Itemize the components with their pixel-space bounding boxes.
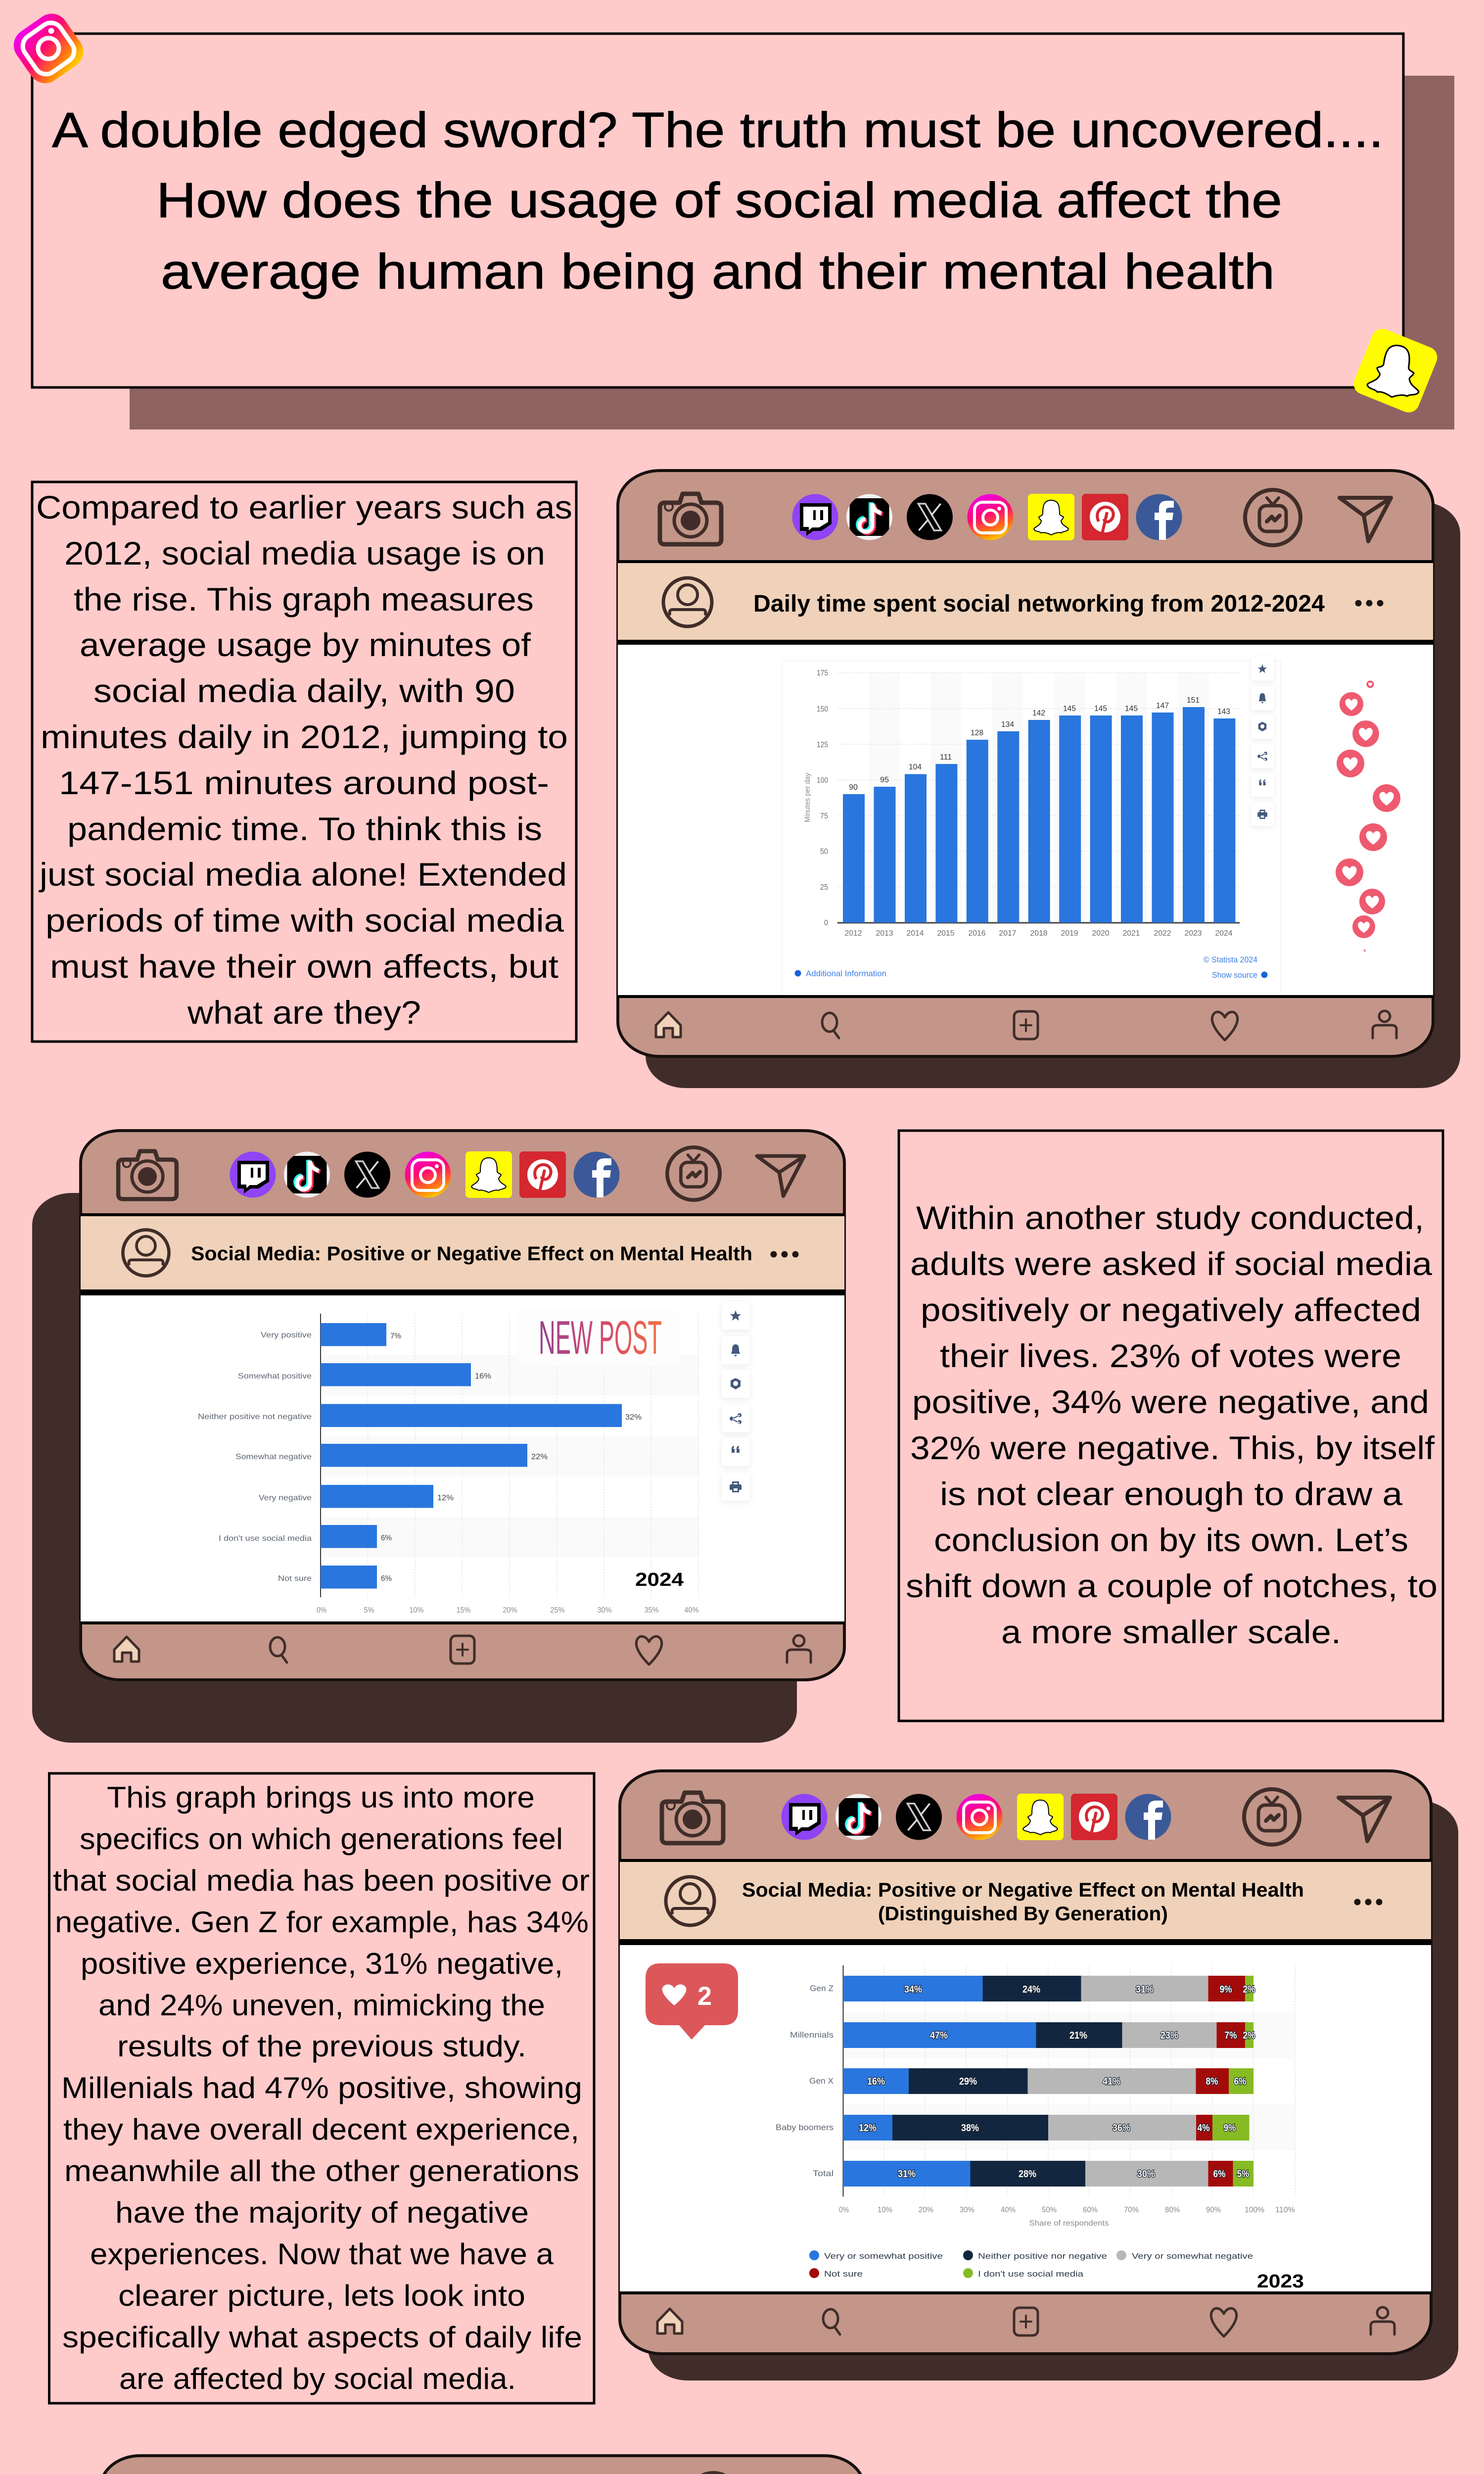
text block: adults study [899, 1131, 1443, 1721]
bar chart: minutes per day: 2017 [999, 929, 1017, 938]
row: Baby boomers: 9% [1224, 2123, 1236, 2134]
bar chart: minutes per day: 2013 [876, 929, 893, 938]
bar chart: minutes per day [782, 661, 1281, 993]
text block: adults study: a more smaller scale. [1001, 1614, 1341, 1650]
bottom navigation icons [114, 1635, 811, 1665]
icon: camera [662, 1793, 723, 1843]
row: Total: 31% [898, 2169, 916, 2180]
text block: usage on the rise: pandemic time. To think this is [67, 810, 542, 847]
row: Millennials: 21% [1069, 2030, 1087, 2041]
text block: usage on the rise: 2012, social media usage is on [64, 535, 545, 571]
bar chart: effect on mental health: Not sure [278, 1574, 312, 1583]
text block: usage on the rise [32, 482, 576, 1042]
x axis labels: Share of respondents [1029, 2219, 1109, 2228]
bar chart: minutes per day: 95 [880, 776, 889, 784]
x axis labels: 20% [919, 2206, 933, 2214]
text block: generations: specifics on which generations feel [80, 1822, 563, 1856]
bar chart: minutes per day: 2016 [969, 929, 986, 938]
bar chart: minutes per day: 134 [1001, 720, 1014, 729]
icon: igtv [687, 2473, 740, 2474]
text block: generations: negative. Gen Z for example, has 34% [55, 1905, 589, 1939]
bar chart: minutes per day: 90 [849, 783, 858, 792]
text block: usage on the rise: Compared to earlier years such as [36, 489, 572, 525]
bar chart: effect on mental health: 10% [410, 1606, 423, 1615]
row: Gen X: 16% [867, 2076, 885, 2087]
text block: generations: and 24% uneven, mimicking the [98, 1989, 545, 2022]
chart toolbar [1251, 657, 1274, 826]
bar chart: minutes per day: 2024 [1215, 929, 1233, 938]
icons: social media row [792, 494, 1182, 540]
text block: usage on the rise: social media daily, with 90 [93, 672, 515, 709]
row: Millennials: 7% [1225, 2030, 1237, 2041]
x axis labels: 30% [960, 2206, 974, 2214]
bar chart: minutes per day: 75 [820, 812, 828, 820]
text block: generations [49, 1773, 594, 2403]
bar chart: minutes per day: 125 [817, 741, 828, 749]
bar chart: minutes per day: 2018 [1030, 929, 1048, 938]
icon: igtv [667, 1147, 720, 1200]
bar chart: minutes per day: 111 [940, 753, 952, 761]
title panel [32, 34, 1403, 387]
chart heading: (Distinguished By Generation) [878, 1903, 1168, 1925]
text block: generations: experiences. Now that we have a [90, 2237, 554, 2271]
bar chart: effect on mental health: Very negative [259, 1494, 312, 1502]
row: Millennials: 23% [1160, 2030, 1178, 2041]
row: Total: 6% [1213, 2169, 1226, 2180]
bar chart: effect on mental health: 30% [598, 1606, 611, 1615]
bar chart: effect on mental health: 22% [531, 1453, 548, 1461]
text block: adults study: 32% were negative. This, by itself [910, 1429, 1435, 1466]
legend: Neither positive nor negative [978, 2251, 1107, 2261]
text block: generations: specifically what aspects of daily life [62, 2321, 582, 2354]
icon: igtv [1245, 490, 1300, 545]
text block: adults study: shift down a couple of notches, to [906, 1568, 1438, 1604]
icon: snapchat sticker [1350, 326, 1440, 416]
row: Baby boomers: 12% [859, 2123, 877, 2134]
title text: A double edged sword? The truth must be uncovered.... [52, 102, 1384, 158]
row: Gen Z: 9% [1220, 1984, 1232, 1995]
bar chart: effect on mental health: 35% [644, 1606, 659, 1615]
text block: adults study: is not clear enough to draw a [940, 1475, 1402, 1512]
chart heading [742, 1879, 1304, 1925]
bar chart: minutes per day: 2023 [1184, 929, 1202, 938]
text block: generations: clearer picture, lets look into [118, 2279, 525, 2312]
chart heading: Social Media: Positive or Negative Effect on Mental Health [191, 1243, 752, 1265]
x axis labels: 40% [1001, 2206, 1016, 2214]
row: Total [813, 2161, 1253, 2187]
text block: generations: positive experience, 31% negative, [81, 1947, 563, 1980]
row: Gen Z: 34% [904, 1984, 922, 1995]
bar chart: minutes per day: 128 [971, 729, 983, 737]
bar chart: minutes per day: 147 [1156, 702, 1169, 710]
bar chart: minutes per day: 145 [1125, 705, 1138, 713]
bar chart: effect on mental health: 6% [381, 1534, 392, 1542]
text block: adults study: conclusion on by its own. Let’s [934, 1522, 1408, 1558]
row: Gen X: 29% [959, 2076, 977, 2087]
text block: usage on the rise: just social media alone! Extended [39, 856, 567, 893]
bar chart: effect on mental health: Neither positive not negative [198, 1413, 312, 1421]
bar chart: minutes per day: 2014 [906, 929, 924, 938]
year label: 2024 [635, 1570, 684, 1590]
text block: usage on the rise: 147-151 minutes around post- [59, 764, 549, 801]
x axis labels: 100% [1245, 2206, 1264, 2214]
icon: camera [660, 494, 721, 544]
bar chart: minutes per day: 2021 [1123, 929, 1140, 938]
x axis labels: 10% [878, 2206, 892, 2214]
floating hearts [1336, 680, 1400, 952]
row: Gen X: 41% [1103, 2076, 1120, 2087]
bar chart: effect on mental health: 32% [625, 1413, 642, 1422]
text block: generations: are affected by social media. [119, 2362, 516, 2395]
row: Baby boomers: 36% [1113, 2123, 1130, 2134]
bar chart: effect on mental health [198, 1314, 698, 1615]
row: Millennials: Millennials [790, 2030, 834, 2040]
row: Gen X: 8% [1206, 2076, 1218, 2087]
title shadow block [130, 76, 1454, 429]
row: Total: 28% [1019, 2169, 1036, 2180]
bar chart: effect on mental health: 0% [317, 1606, 326, 1615]
bar chart: effect on mental health: Somewhat negative [235, 1453, 312, 1461]
bar chart: effect on mental health: 12% [437, 1494, 454, 1502]
x axis labels: 90% [1206, 2206, 1221, 2214]
icon: more dots [771, 1251, 798, 1258]
icon: paper plane [757, 1156, 804, 1196]
text block: usage on the rise: what are they? [187, 994, 421, 1031]
title text [52, 102, 1384, 299]
text block: usage on the rise: periods of time with social media [46, 902, 564, 939]
row: Millennials: 2% [1243, 2030, 1255, 2041]
row: Baby boomers: 4% [1197, 2123, 1210, 2134]
chart heading: Social Media: Positive or Negative Effect on Mental Health [742, 1879, 1304, 1901]
panel: phone 1, daily time chart [618, 471, 1433, 1056]
x axis labels: 80% [1165, 2206, 1180, 2214]
text block: usage on the rise: minutes daily in 2012, jumping to [41, 718, 568, 755]
bottom navigation icons [657, 2307, 1394, 2336]
icon: more dots [1354, 1899, 1382, 1905]
bar chart: minutes per day: 104 [909, 763, 922, 771]
bar chart: minutes per day: 2015 [937, 929, 955, 938]
icons: social media row [782, 1794, 1171, 1840]
bar chart: effect on mental health: 20% [503, 1606, 517, 1615]
bar chart: minutes per day: 150 [817, 705, 828, 714]
text block: generations: results of the previous study. [117, 2030, 526, 2063]
bar chart: effect on mental health: 15% [456, 1606, 471, 1615]
row: Baby boomers: 38% [961, 2123, 979, 2134]
sticker: new post [518, 1309, 680, 1365]
text block: generations: they have overall decent experience, [63, 2113, 579, 2146]
bar chart: minutes per day: 2019 [1061, 929, 1078, 938]
bar chart: minutes per day: 145 [1094, 705, 1107, 713]
x axis labels: 70% [1124, 2206, 1139, 2214]
x axis labels: 50% [1042, 2206, 1057, 2214]
panel: phone 3, generations chart [620, 1771, 1431, 2354]
legend: Very or somewhat positive [824, 2251, 943, 2261]
bar chart: minutes per day: 50 [820, 848, 828, 856]
bar chart: minutes per day: Show source [1212, 970, 1257, 980]
row: Gen Z: 31% [1136, 1984, 1154, 1995]
legend [809, 2250, 1253, 2279]
icon: igtv [1244, 1789, 1299, 1845]
bar chart: effect on mental health: 7% [390, 1332, 401, 1340]
bar chart: minutes per day: 151 [1187, 696, 1200, 705]
bar chart: effect on mental health: 16% [475, 1372, 491, 1380]
legend: Not sure [824, 2269, 863, 2279]
stacked bar chart: by generation [776, 1965, 1295, 2279]
row: Gen Z: Gen Z [810, 1984, 834, 1993]
icon: like notification: 2 [697, 1982, 712, 2011]
bar chart: minutes per day: 142 [1032, 709, 1045, 717]
phone shadow 1 [646, 502, 1460, 1088]
bar chart: effect on mental health: I don't use social media [219, 1534, 312, 1543]
icon: avatar [123, 1230, 169, 1276]
x axis labels: 60% [1083, 2206, 1098, 2214]
bar chart: minutes per day: 2020 [1092, 929, 1110, 938]
x axis labels [839, 2206, 1295, 2228]
chart heading: Daily time spent social networking from 2012-2024 [753, 591, 1325, 617]
bar chart: minutes per day: 25 [820, 883, 828, 892]
bar chart: effect on mental health: 6% [381, 1574, 392, 1583]
row: Total: Total [813, 2169, 834, 2178]
icon: camera [118, 1151, 177, 1199]
text block: adults study: adults were asked if social media [910, 1245, 1432, 1282]
row: Gen Z: 2% [1243, 1984, 1255, 1995]
bar chart: effect on mental health: 5% [364, 1606, 374, 1615]
bar chart: effect on mental health: Somewhat positive [238, 1372, 312, 1380]
title text: How does the usage of social media affect the [156, 173, 1282, 228]
icon: like notification [646, 1963, 738, 2040]
icon: paper plane [1339, 1798, 1390, 1841]
title text: average human being and their mental health [161, 244, 1275, 299]
bar chart: minutes per day: 0 [824, 919, 828, 927]
icon: paper plane [1340, 498, 1391, 541]
text block: adults study: their lives. 23% of votes were [940, 1337, 1401, 1374]
row: Gen Z [810, 1976, 1255, 2001]
bar chart: minutes per day: 2022 [1154, 929, 1171, 938]
text block: usage on the rise: average usage by minutes of [80, 626, 531, 663]
phone shadow 3 [648, 1801, 1458, 2380]
text block: adults study: positively or negatively affected [921, 1291, 1421, 1328]
phone shadow 2 [32, 1193, 797, 1743]
bar chart: minutes per day: 100 [817, 776, 828, 785]
row: Gen X: Gen X [809, 2076, 834, 2086]
bar chart: minutes per day: 143 [1217, 708, 1230, 716]
text block: generations: that social media has been positive or [53, 1864, 590, 1897]
row: Total: 5% [1237, 2169, 1250, 2180]
row: Baby boomers [776, 2115, 1250, 2141]
text block: usage on the rise: the rise. This graph measures [74, 581, 534, 618]
row: Millennials [790, 2022, 1255, 2048]
x axis labels: 110% [1275, 2206, 1295, 2214]
sticker: new post: NEW POST [539, 1311, 662, 1364]
chart toolbar [722, 1301, 750, 1501]
bar chart: minutes per day: 2012 [845, 929, 862, 938]
x axis labels: 0% [839, 2206, 849, 2214]
row: Baby boomers: Baby boomers [776, 2123, 834, 2132]
bar chart: effect on mental health: 25% [550, 1606, 565, 1615]
bar chart: effect on mental health: Very positive [261, 1331, 312, 1339]
year label: 2023 [1257, 2271, 1304, 2292]
icon: avatar [666, 1877, 714, 1925]
text block: generations: Millenials had 47% positive, showing [61, 2071, 582, 2104]
icons: social media row [230, 1151, 619, 1198]
legend: Very or somewhat negative [1132, 2251, 1253, 2261]
text block: generations: have the majority of negative [115, 2196, 529, 2229]
panel: phone 2, positive or negative chart [81, 1131, 844, 1680]
row: Millennials: 47% [930, 2030, 948, 2041]
text block: generations: This graph brings us into more [107, 1781, 535, 1814]
panel: phone 4, aspects of daily life chart [100, 2456, 864, 2474]
bar chart: effect on mental health: 40% [685, 1606, 698, 1615]
text block: adults study: Within another study conducted, [916, 1199, 1424, 1236]
icon: more dots [1355, 600, 1383, 607]
bar chart: minutes per day: Minutes per day [803, 773, 812, 822]
row: Gen Z: 24% [1022, 1984, 1040, 1995]
bar chart: minutes per day: Additional Information [806, 969, 886, 978]
icon: avatar [663, 578, 712, 626]
row: Gen X: 6% [1234, 2076, 1247, 2087]
text block: adults study: positive, 34% were negative, and [912, 1383, 1429, 1420]
icon: instagram sticker [7, 7, 90, 90]
bottom navigation icons [656, 1011, 1396, 1040]
text block: usage on the rise: must have their own affects, but [50, 948, 558, 985]
bar chart: minutes per day: © Statista 2024 [1204, 955, 1257, 964]
legend: I don't use social media [978, 2269, 1084, 2279]
bar chart: minutes per day: 145 [1063, 705, 1076, 713]
text block: generations: meanwhile all the other generations [64, 2154, 579, 2188]
row: Total: 30% [1137, 2169, 1155, 2180]
bar chart: minutes per day: 175 [817, 669, 828, 677]
row: Gen X [809, 2068, 1253, 2094]
